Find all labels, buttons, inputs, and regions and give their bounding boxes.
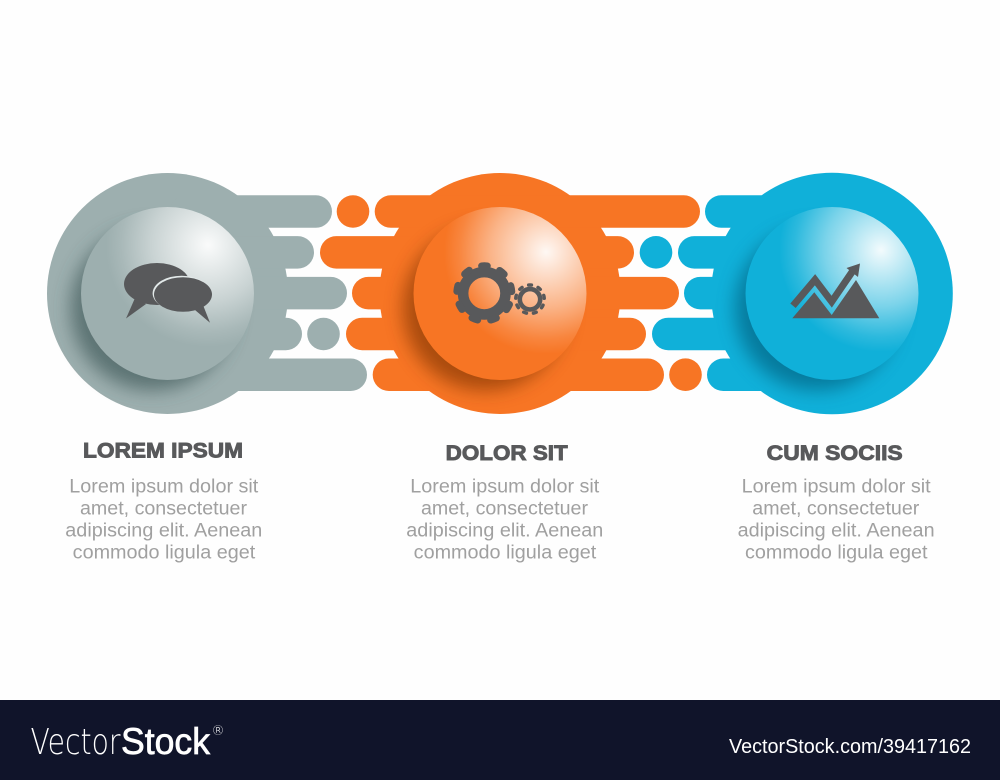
heading: Dolor sit: DOLOR SIT — [446, 442, 568, 465]
panel: orange step shape — [320, 173, 702, 414]
text block: Cum sociis description — [738, 476, 935, 564]
icon: rising chart over mountains — [792, 264, 879, 318]
sphere: gray — [70, 207, 254, 390]
column: Cum sociis — [738, 442, 935, 564]
footer logo: Vector — [30, 722, 121, 763]
text block: Lorem ipsum description — [65, 476, 262, 564]
heading: Lorem ipsum: LOREM IPSUM — [83, 440, 243, 462]
sphere: blue — [735, 207, 918, 390]
text block: Lorem ipsum description: amet, consectetuer — [80, 498, 247, 520]
text block: Cum sociis description: commodo ligula eget — [745, 542, 928, 564]
text block: Dolor sit description: adipiscing elit. Aenean — [406, 520, 603, 542]
heading: Cum sociis: CUM SOCIIS — [767, 442, 903, 465]
text block: Lorem ipsum description: adipiscing elit. Aenean — [65, 520, 262, 542]
footer logo — [30, 721, 224, 763]
icon: speech bubbles — [124, 263, 212, 323]
footer logo: Stock — [121, 721, 210, 762]
text block: Cum sociis description: amet, consectetuer — [752, 498, 920, 520]
column: Lorem ipsum — [65, 440, 262, 564]
text block: Dolor sit description: amet, consectetuer — [421, 498, 588, 520]
text block: Dolor sit description: commodo ligula eget — [414, 542, 597, 564]
column: Dolor sit — [406, 442, 603, 564]
panel: blue step shape — [640, 173, 953, 414]
footer image id: VectorStock.com/39417162 — [729, 736, 971, 758]
text block: Cum sociis description: Lorem ipsum dolor sit — [742, 476, 931, 498]
text block: Dolor sit description: Lorem ipsum dolor sit — [410, 476, 600, 498]
text block: Lorem ipsum description: Lorem ipsum dolor sit — [69, 476, 259, 498]
icon: gears — [457, 266, 544, 321]
footer logo: ® — [212, 724, 224, 739]
text block: Cum sociis description: adipiscing elit. Aenean — [738, 520, 935, 542]
footer bar — [0, 700, 1000, 780]
text block: Lorem ipsum description: commodo ligula eget — [73, 542, 256, 564]
sphere: orange — [403, 207, 586, 390]
text block: Dolor sit description — [406, 476, 603, 564]
panel: gray step shape — [47, 173, 367, 414]
